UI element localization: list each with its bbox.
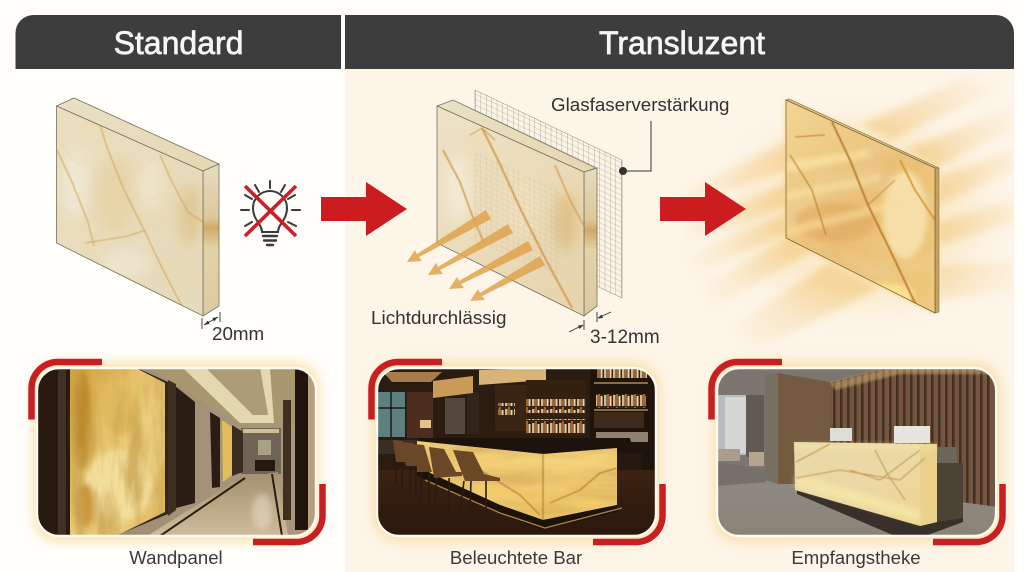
arrow: standard to translucent bbox=[321, 182, 407, 236]
header: Standard bbox=[16, 15, 341, 69]
fiberglass mesh layer bbox=[475, 90, 622, 298]
header: Transluzent: Transluzent bbox=[599, 25, 765, 61]
header: Transluzent bbox=[345, 15, 1014, 69]
icon: crossed-out light bulb bbox=[241, 181, 300, 245]
dimension: 3-12mm bbox=[569, 312, 660, 348]
label: Empfangstheke: Empfangstheke bbox=[791, 547, 921, 568]
red corner brackets: Wandpanel bbox=[32, 362, 322, 542]
label: Wandpanel: Wandpanel bbox=[129, 547, 223, 568]
dimension: 20mm: 20mm bbox=[212, 323, 264, 344]
panel: translucent marble slab bbox=[430, 100, 597, 320]
application image: Beleuchtete Bar bbox=[374, 363, 659, 541]
header: Standard: Standard bbox=[114, 25, 243, 61]
light rays around glowing slab bbox=[670, 75, 1014, 350]
dimension: 3-12mm: 3-12mm bbox=[590, 327, 660, 348]
red corner brackets: Beleuchtete Bar bbox=[372, 362, 662, 542]
label: Beleuchtete Bar: Beleuchtete Bar bbox=[450, 547, 582, 568]
red corner brackets: Empfangstheke bbox=[712, 362, 1002, 542]
light arrows through the slab bbox=[407, 210, 545, 301]
panel: Transluzent background bbox=[345, 69, 1014, 572]
callout: Glasfaserverstärkung: Glasfaserverstärkung bbox=[551, 94, 730, 115]
arrow: translucent to glowing bbox=[660, 182, 746, 236]
application image: Wandpanel corridor bbox=[34, 363, 319, 541]
panel: standard marble slab bbox=[50, 98, 219, 320]
label: Lichtdurchlässig: Lichtdurchlässig bbox=[371, 308, 506, 329]
application image: Empfangstheke bbox=[714, 363, 999, 541]
dimension: 20mm bbox=[202, 312, 264, 344]
callout: Glasfaserverstärkung bbox=[551, 94, 730, 175]
panel: glowing translucent slab bbox=[780, 95, 945, 320]
